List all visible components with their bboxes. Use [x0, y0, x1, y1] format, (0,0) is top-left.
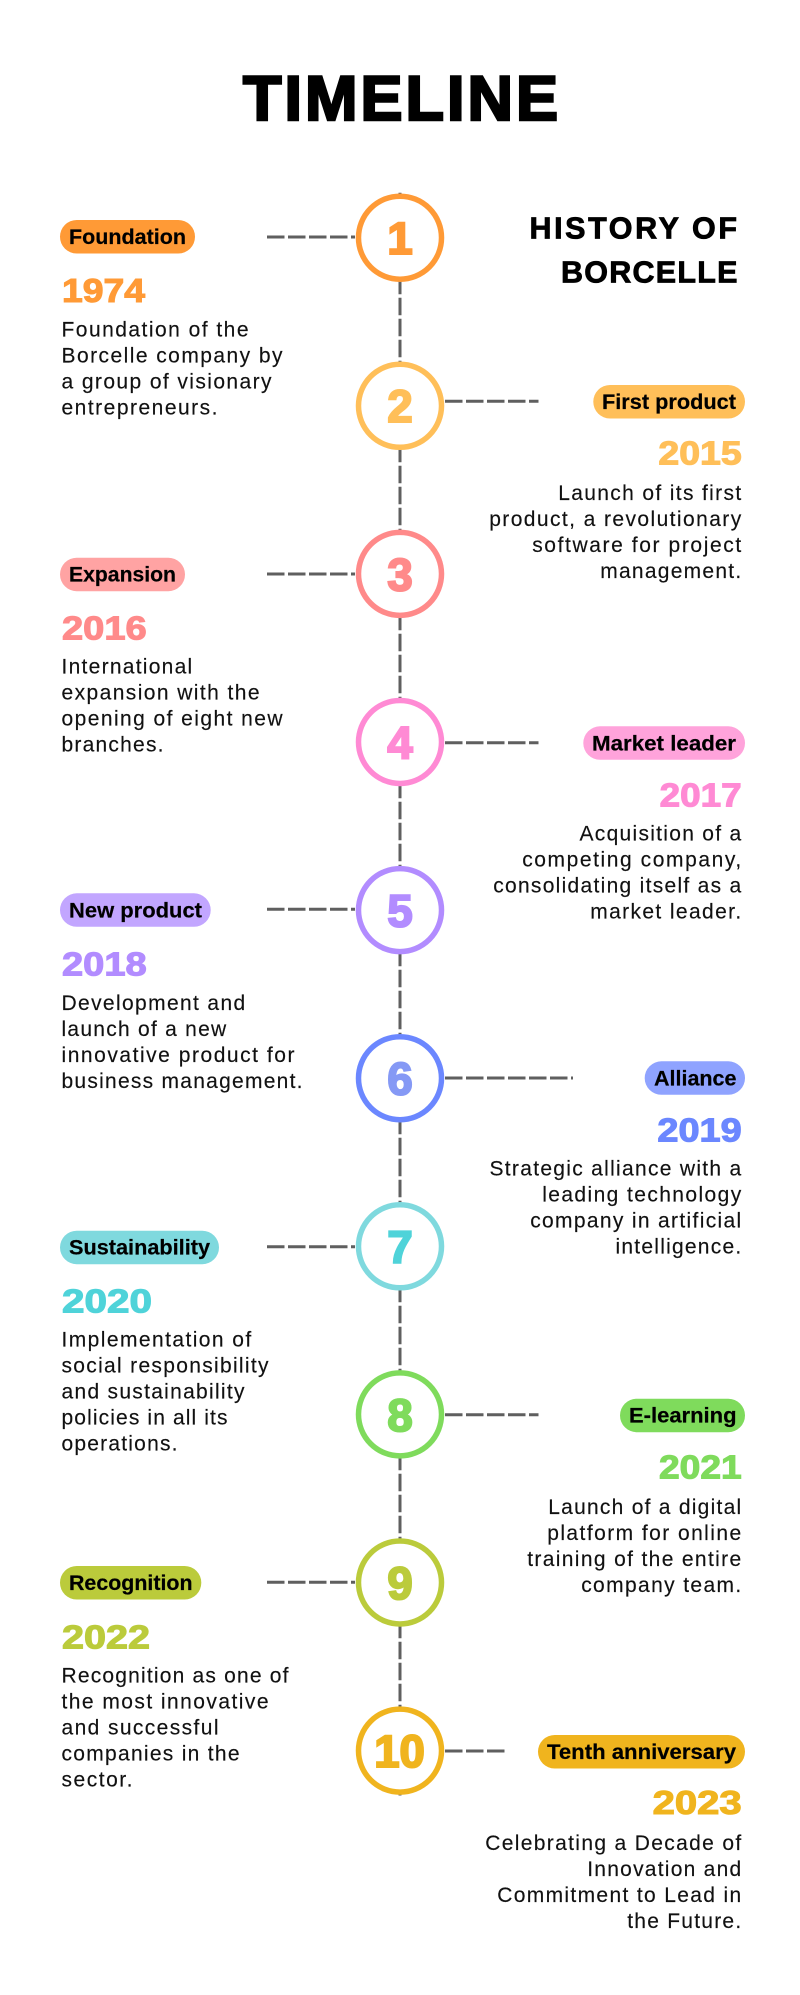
subtitle: history of Borcelle	[530, 211, 738, 289]
description 2: software for project	[532, 534, 741, 557]
description 10: Innovation and	[587, 1858, 741, 1881]
pill: New product	[60, 893, 211, 927]
description 7: Implementation of	[62, 1329, 251, 1352]
description 3: opening of eight new	[62, 707, 283, 730]
description 5: innovative product for	[62, 1044, 294, 1067]
pill: Expansion	[60, 558, 185, 591]
circle 4: 4	[387, 717, 413, 768]
description 6: Strategic alliance with a	[490, 1158, 742, 1181]
description 3: International	[62, 655, 192, 678]
description 9: sector.	[62, 1769, 132, 1792]
year 2016: 2016	[62, 609, 147, 646]
description 4: market leader.	[590, 901, 741, 924]
description 5: business management.	[62, 1070, 302, 1093]
pill: First product: First product	[602, 391, 736, 414]
subtitle: history of Borcelle: BORCELLE	[561, 255, 738, 289]
milestone 5: New product	[60, 869, 442, 1093]
circle 2	[358, 364, 442, 447]
description 8: training of the entire	[527, 1548, 741, 1571]
pill: Recognition: Recognition	[69, 1572, 192, 1595]
description 6: intelligence.	[616, 1236, 741, 1259]
description 1: a group of visionary	[62, 371, 272, 394]
pill: Market leader	[583, 726, 745, 760]
pill: Sustainability	[60, 1231, 219, 1264]
pill: Market leader: Market leader	[592, 732, 736, 755]
description 4: competing company,	[522, 849, 741, 872]
description 5: Development and	[62, 992, 245, 1015]
circle 5	[358, 869, 442, 952]
description 8: company team.	[581, 1574, 741, 1597]
title: TIMELINE	[243, 64, 558, 134]
pill: Recognition	[60, 1566, 201, 1600]
circle 9: 9	[387, 1558, 413, 1609]
circle 3	[358, 532, 442, 615]
description 10: the Future.	[627, 1910, 741, 1933]
pill: Expansion: Expansion	[69, 564, 176, 587]
milestone 3: Expansion	[60, 532, 442, 756]
description 10	[485, 1832, 741, 1933]
description 2	[489, 482, 742, 583]
description 2: management.	[600, 560, 741, 583]
description 8: platform for online	[547, 1522, 741, 1545]
pill: Alliance	[645, 1061, 745, 1095]
description 7: operations.	[62, 1433, 178, 1456]
pill: New product: New product	[69, 899, 202, 922]
description 6: leading technology	[542, 1184, 742, 1207]
pill: Foundation: Foundation	[69, 226, 186, 249]
pill: Foundation	[60, 220, 195, 254]
milestone 1: Foundation	[60, 196, 442, 420]
description 7: social responsibility	[62, 1355, 269, 1378]
description 3	[62, 655, 283, 756]
year 2021: 2021	[659, 1449, 742, 1486]
milestone 2: First product	[358, 364, 745, 583]
description 6: company in artificial	[530, 1210, 741, 1233]
year 2020: 2020	[62, 1283, 152, 1320]
description 4	[493, 823, 742, 924]
year 2017: 2017	[660, 777, 742, 814]
description 8: Launch of a digital	[548, 1496, 741, 1519]
pill: First product	[593, 385, 745, 418]
description 10: Celebrating a Decade of	[485, 1832, 741, 1855]
circle 4	[358, 700, 442, 784]
description 1	[62, 319, 283, 420]
description 4: consolidating itself as a	[493, 875, 742, 898]
description 6	[490, 1158, 742, 1259]
description 7	[62, 1329, 269, 1456]
milestone 8: E-learning	[358, 1373, 745, 1597]
circle 10	[358, 1709, 442, 1792]
subtitle: history of Borcelle: HISTORY OF	[530, 211, 737, 245]
circle 5: 5	[387, 885, 413, 936]
description 4: Acquisition of a	[580, 823, 742, 846]
circle 8	[358, 1373, 442, 1456]
circle 1: 1	[387, 213, 413, 264]
pill: Tenth anniversary	[538, 1735, 745, 1768]
milestone 7: Sustainability	[60, 1205, 442, 1456]
year 1974: 1974	[62, 272, 146, 309]
pill: Alliance: Alliance	[654, 1067, 736, 1090]
description 10: Commitment to Lead in	[497, 1884, 741, 1907]
year 2022: 2022	[62, 1619, 150, 1656]
year 2023: 2023	[653, 1784, 742, 1821]
description 9: the most innovative	[62, 1691, 268, 1714]
description 9: and successful	[62, 1717, 218, 1740]
circle 6	[358, 1037, 442, 1120]
circle 10: 10	[374, 1726, 425, 1777]
year 2018: 2018	[62, 945, 147, 982]
milestone 10: Tenth anniversary	[358, 1709, 745, 1933]
description 9: Recognition as one of	[62, 1665, 289, 1688]
milestone 4: Market leader	[358, 700, 745, 924]
circle 3: 3	[387, 549, 413, 600]
description 1: Foundation of the	[62, 319, 248, 342]
description 8	[527, 1496, 741, 1597]
description 3: expansion with the	[62, 681, 260, 704]
pill: E-learning: E-learning	[629, 1405, 736, 1428]
pill: Tenth anniversary: Tenth anniversary	[547, 1741, 736, 1764]
circle 2: 2	[387, 381, 413, 432]
description 5: launch of a new	[62, 1018, 227, 1041]
year 2015: 2015	[658, 434, 742, 471]
description 2: product, a revolutionary	[489, 508, 742, 531]
description 1: Borcelle company by	[62, 345, 283, 368]
description 3: branches.	[62, 733, 164, 756]
year 2019: 2019	[657, 1112, 742, 1149]
circle 1	[358, 196, 442, 279]
pill: Sustainability: Sustainability	[69, 1237, 210, 1260]
milestone 9: Recognition	[60, 1541, 442, 1792]
description 5	[62, 992, 302, 1093]
milestone 6: Alliance	[358, 1037, 745, 1259]
description 9	[62, 1665, 289, 1792]
description 7: policies in all its	[62, 1407, 228, 1430]
description 9: companies in the	[62, 1743, 240, 1766]
circle 8: 8	[387, 1390, 413, 1441]
description 7: and sustainability	[62, 1381, 245, 1404]
circle 7: 7	[387, 1222, 413, 1273]
description 2: Launch of its first	[558, 482, 741, 505]
description 1: entrepreneurs.	[62, 397, 218, 420]
timeline spine	[398, 193, 402, 1795]
pill: E-learning	[620, 1399, 745, 1432]
circle 9	[358, 1541, 442, 1624]
circle 6: 6	[387, 1054, 413, 1105]
circle 7	[358, 1205, 442, 1288]
